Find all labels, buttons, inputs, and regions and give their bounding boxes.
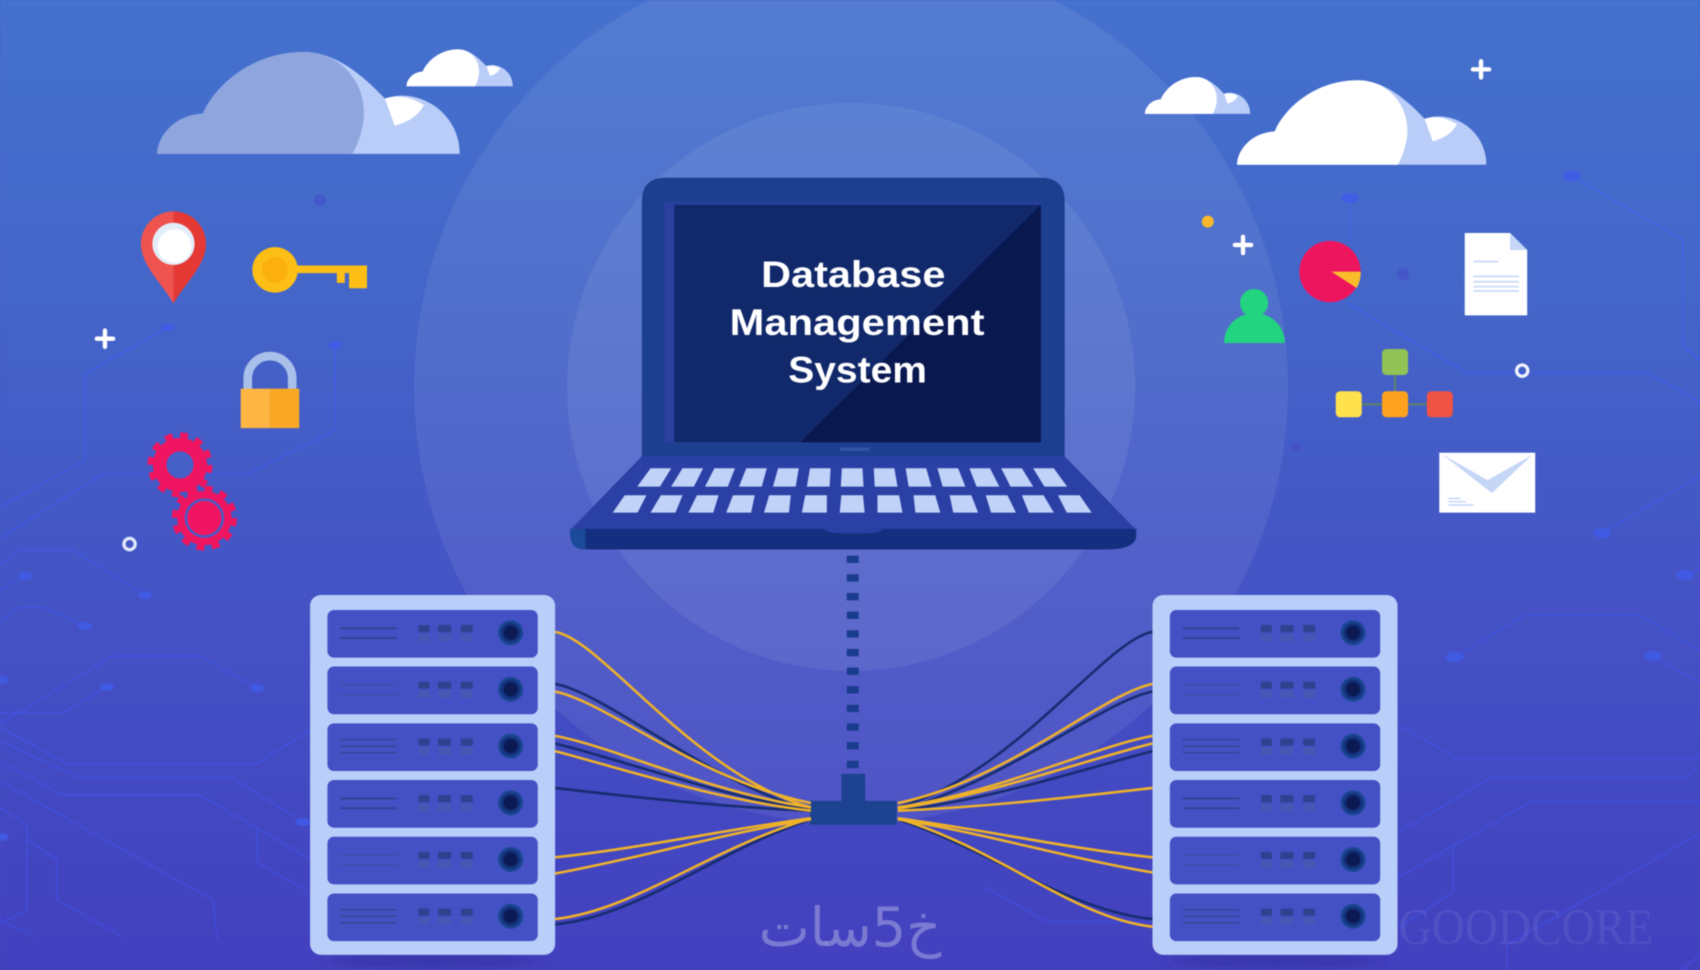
cloud: small left — [407, 49, 513, 86]
decoration: plus sign left — [97, 331, 113, 347]
laptop keyboard deck — [570, 456, 1136, 530]
shadow: right rack — [1167, 952, 1383, 967]
icon: location pin — [141, 211, 206, 303]
server slot 3 — [327, 723, 538, 771]
laptop thumb notch — [824, 529, 884, 533]
keyboard keys — [613, 468, 1092, 513]
server slot 1 — [1170, 610, 1380, 658]
icon: document — [1465, 233, 1527, 315]
screen title: Database — [761, 254, 945, 295]
laptop hinge — [840, 448, 870, 451]
decoration: yellow dot — [1202, 216, 1214, 228]
icon: envelope — [1439, 453, 1535, 513]
server slot 4 — [327, 780, 538, 828]
server slot 2 — [327, 667, 538, 714]
server slot 1 — [327, 610, 538, 658]
shadow: left rack — [324, 952, 541, 967]
server slot 3 — [1170, 723, 1380, 771]
icon: padlock — [241, 356, 299, 428]
rack frame — [1153, 595, 1398, 955]
server slot 5 — [1170, 837, 1380, 884]
laptop lid — [642, 178, 1065, 457]
icon: person — [1224, 289, 1285, 343]
inner halo circle — [567, 103, 1135, 671]
screen dark diagonal — [800, 205, 1041, 442]
server slot 4 — [1170, 780, 1380, 828]
screen title: Management — [730, 302, 984, 343]
decoration: ring right — [1517, 365, 1528, 376]
decoration: plus sign near person — [1235, 237, 1251, 253]
server rack: right — [1153, 595, 1398, 955]
laptop base left edge — [570, 529, 585, 549]
watermark: GOODCORE: GOODCORE — [1399, 900, 1653, 956]
cloud: large right — [1237, 80, 1486, 165]
outer halo circle — [414, 0, 1288, 824]
server slot 5 — [327, 837, 538, 884]
server slot 2 — [1170, 667, 1380, 714]
server slot 6 — [1170, 893, 1380, 941]
icon: org chart — [1336, 349, 1453, 417]
laptop base lip — [570, 529, 1136, 549]
decoration: plus sign top right — [1473, 61, 1489, 77]
screen title — [730, 254, 984, 391]
server rack: left — [310, 595, 555, 955]
server slot 6 — [327, 893, 538, 941]
cloud: large left — [157, 52, 460, 154]
screen title: System — [788, 350, 927, 391]
cables: right — [898, 632, 1153, 927]
icon: key — [252, 247, 367, 293]
rack frame — [310, 595, 555, 955]
watermark: Arabic logo: خ5سات — [759, 896, 941, 959]
laptop screen — [674, 205, 1041, 442]
decoration: ring left — [124, 538, 135, 550]
cables: left — [555, 632, 811, 924]
cloud: small right — [1145, 77, 1250, 114]
laptop — [570, 178, 1136, 549]
dashed connector — [847, 556, 858, 776]
hub connector — [810, 774, 897, 825]
icon: gears — [151, 436, 234, 547]
icon: pie chart — [1299, 241, 1361, 302]
laptop screen bezel — [665, 202, 1041, 442]
